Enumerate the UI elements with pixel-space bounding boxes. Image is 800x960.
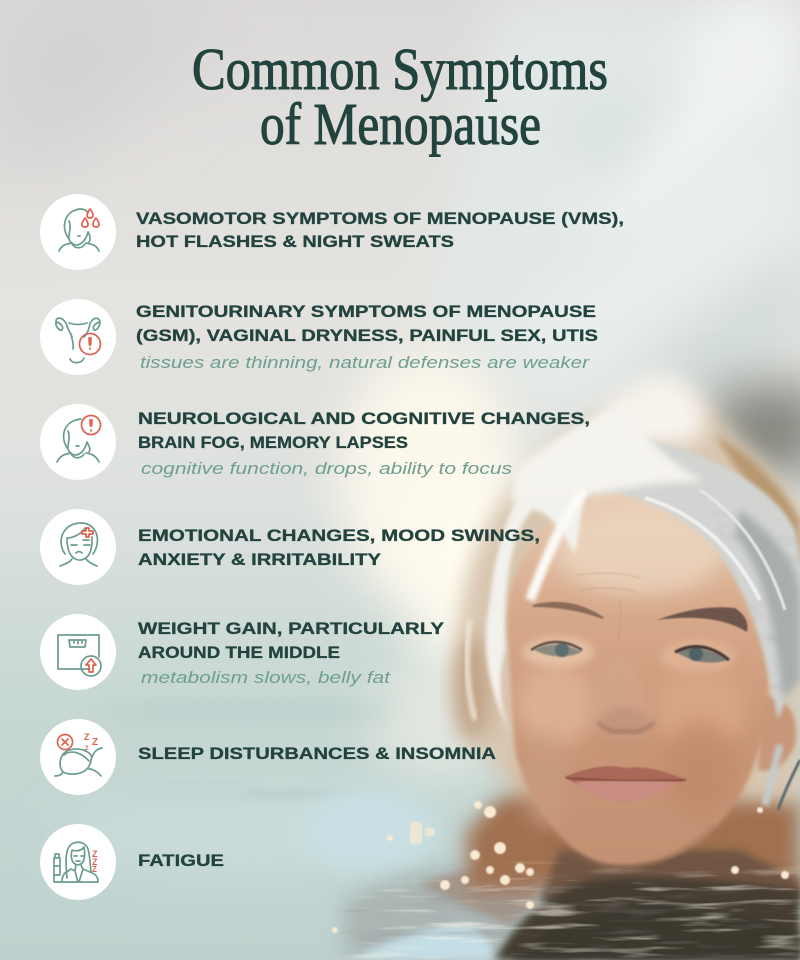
icon: sleeper with cross and z letters: Z (84, 732, 90, 742)
item: vasomotor symptoms: HOT FLASHES & NIGHT SWEATS (136, 232, 454, 251)
title (192, 36, 608, 157)
item: sleep disturbances (40, 719, 496, 795)
title: Common Symptoms (192, 36, 608, 102)
photo: older woman with silver hair in water (330, 375, 800, 960)
item: neurological and cognitive changes (40, 404, 590, 480)
icon: tired woman with bottle: Z (92, 865, 97, 874)
item: vasomotor symptoms (40, 194, 624, 270)
icon: scale with up arrow (40, 614, 116, 690)
item: genitourinary symptoms: GENITOURINARY SYMPTOMS OF MENOPAUSE (136, 302, 596, 321)
item: weight gain: WEIGHT GAIN, PARTICULARLY (138, 619, 445, 638)
item: neurological and cognitive changes: BRAIN FOG, MEMORY LAPSES (138, 433, 408, 452)
ripples and sparkles (347, 861, 800, 960)
icon: sad face with mark (40, 509, 116, 585)
item: neurological and cognitive changes: cognitive function, drops, ability to focus (141, 460, 512, 478)
eyebrows (533, 603, 603, 618)
ear (758, 695, 796, 771)
hair back mass (457, 390, 800, 800)
face (506, 488, 769, 866)
icon: sleeper with cross and z letters (40, 719, 116, 795)
icon: tired woman with bottle: Z (92, 857, 98, 867)
item: genitourinary symptoms: (GSM), VAGINAL DRYNESS, PAINFUL SEX, UTIS (136, 326, 598, 345)
item: weight gain: metabolism slows, belly fat (141, 669, 392, 687)
icon: tired woman with bottle: Z (92, 849, 98, 859)
item: genitourinary symptoms (40, 299, 598, 375)
item: genitourinary symptoms: tissues are thinning, natural defenses are weaker (140, 354, 591, 372)
icon: sleeper with cross and z letters: Z (92, 737, 98, 748)
item: vasomotor symptoms: VASOMOTOR SYMPTOMS OF MENOPAUSE (VMS), (136, 209, 624, 228)
icon: tired woman with bottle (40, 824, 116, 900)
item: fatigue: FATIGUE (138, 851, 224, 870)
forehead lines (575, 573, 640, 640)
item: emotional changes: ANXIETY & IRRITABILITY (138, 550, 382, 569)
neck and shoulders (465, 790, 800, 890)
item: weight gain: AROUND THE MIDDLE (138, 643, 340, 662)
item: neurological and cognitive changes: NEUROLOGICAL AND COGNITIVE CHANGES, (138, 409, 590, 428)
water around the shoulders (345, 865, 800, 960)
icon: head with sweat drops (40, 194, 116, 270)
chin shadow (530, 825, 715, 868)
lips (564, 766, 686, 802)
silver hair front (590, 425, 800, 720)
item: emotional changes: EMOTIONAL CHANGES, MOOD SWINGS, (138, 526, 540, 545)
item: sleep disturbances: SLEEP DISTURBANCES & INSOMNIA (138, 744, 496, 763)
item: emotional changes (40, 509, 540, 585)
nose (590, 660, 655, 739)
dark water (495, 878, 800, 960)
icon: sleeper with cross and z letters: Z (85, 746, 89, 752)
icon: uterus with alert (40, 299, 116, 375)
eyes (522, 637, 594, 667)
item: fatigue (40, 824, 224, 900)
item: weight gain (40, 614, 445, 690)
title: of Menopause (260, 91, 541, 157)
icon: head with alert (40, 404, 116, 480)
